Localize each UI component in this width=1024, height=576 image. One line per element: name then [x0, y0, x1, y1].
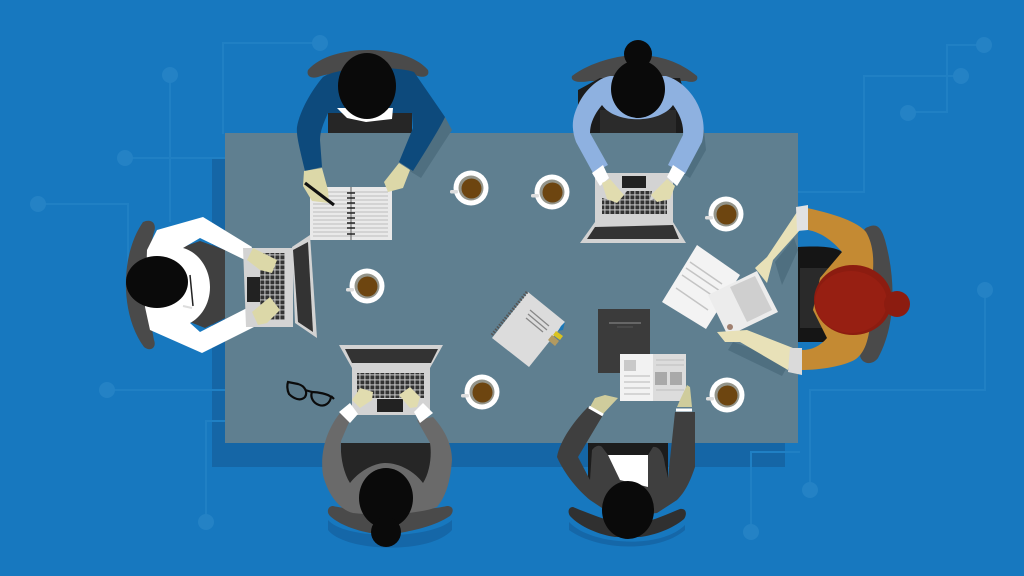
chair — [860, 225, 893, 363]
glasses — [287, 382, 334, 406]
notebook — [310, 187, 392, 240]
arm lower — [717, 330, 793, 370]
head — [338, 53, 396, 119]
shirt — [608, 455, 648, 487]
chair shadow — [569, 522, 685, 546]
glasses — [190, 275, 193, 306]
hair — [814, 265, 892, 335]
left laptop — [243, 235, 317, 338]
cuff upper — [796, 205, 808, 231]
jacket — [322, 413, 452, 514]
shirt — [145, 217, 258, 353]
person: bottom man — [557, 385, 695, 546]
seat — [328, 113, 412, 133]
chair — [328, 506, 453, 533]
cuff lower — [788, 348, 802, 375]
hand right — [384, 163, 410, 192]
arm shadow — [408, 117, 452, 178]
blouse — [573, 76, 704, 174]
chair — [569, 507, 686, 537]
person: top right woman — [572, 40, 706, 178]
cuffs and hands — [592, 165, 609, 186]
arm shadows — [728, 342, 790, 376]
jacket — [297, 68, 445, 171]
top laptop — [580, 165, 686, 243]
hair — [624, 40, 652, 68]
person: right woman — [717, 205, 910, 376]
jacket — [557, 407, 695, 516]
dark folder — [598, 309, 650, 373]
arm upper — [755, 212, 800, 283]
seat — [183, 241, 225, 328]
seat — [600, 110, 676, 133]
chair — [308, 50, 428, 78]
head — [602, 481, 654, 539]
person: top left man — [297, 50, 452, 205]
open magazine — [620, 354, 686, 401]
seat — [588, 443, 668, 480]
jacket — [802, 208, 873, 370]
hands — [590, 395, 618, 415]
person: bottom woman — [322, 413, 453, 548]
seat — [341, 443, 432, 485]
chair shadow — [328, 520, 452, 548]
person: left man — [126, 217, 258, 353]
chair — [572, 55, 697, 82]
bottom laptop — [339, 345, 443, 423]
head — [126, 256, 188, 308]
table shadow — [212, 158, 785, 467]
head — [359, 468, 413, 528]
coffee cups — [346, 170, 744, 412]
seat — [798, 247, 842, 342]
table — [225, 133, 798, 443]
papers — [662, 245, 778, 336]
arm shadow — [680, 125, 706, 178]
hand left with pen — [303, 168, 329, 203]
spiral notebook — [491, 292, 565, 367]
chair — [126, 221, 155, 349]
shirt collar — [337, 108, 393, 122]
